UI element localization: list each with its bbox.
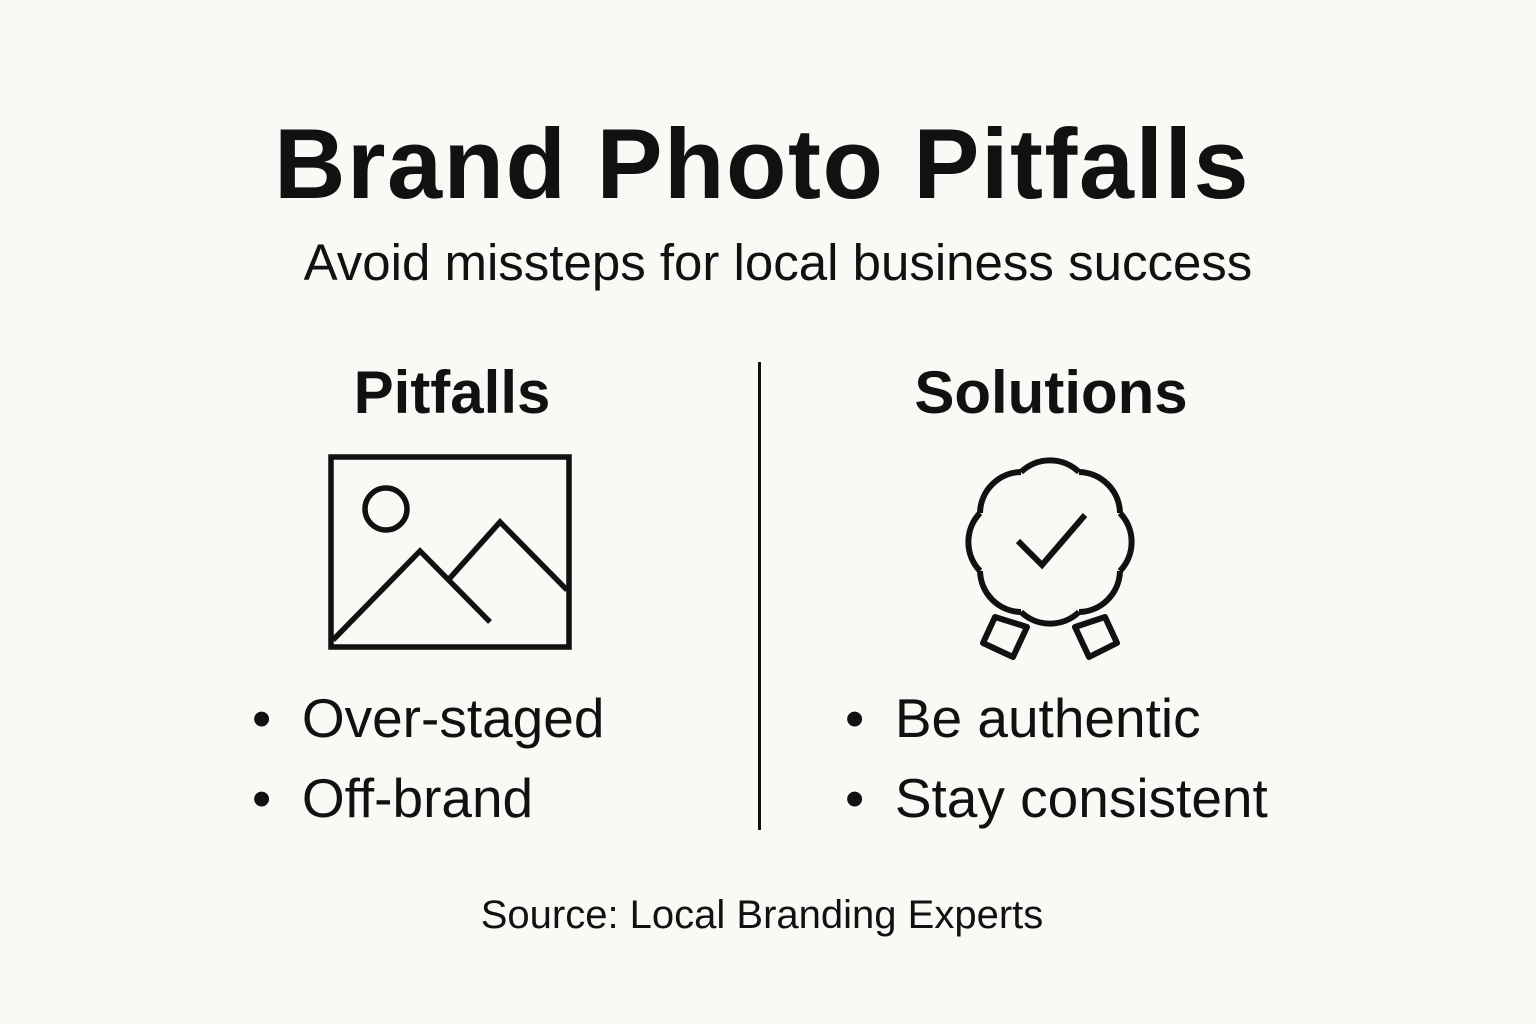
list: pitfalls: • Off-brand <box>252 767 533 829</box>
list: solutions <box>845 687 1268 829</box>
list: solutions: • Be authentic <box>845 687 1201 749</box>
source: Source: Local Branding Experts <box>481 893 1043 937</box>
heading: pitfalls: Pitfalls <box>354 359 550 426</box>
title: Brand Photo Pitfalls <box>274 108 1250 219</box>
list: solutions: • Stay consistent <box>845 767 1268 829</box>
subtitle: Avoid missteps for local business success <box>304 234 1252 291</box>
list: pitfalls <box>252 687 604 829</box>
divider <box>758 362 761 830</box>
heading: solutions: Solutions <box>914 359 1188 426</box>
list: pitfalls: • Over-staged <box>252 687 604 749</box>
